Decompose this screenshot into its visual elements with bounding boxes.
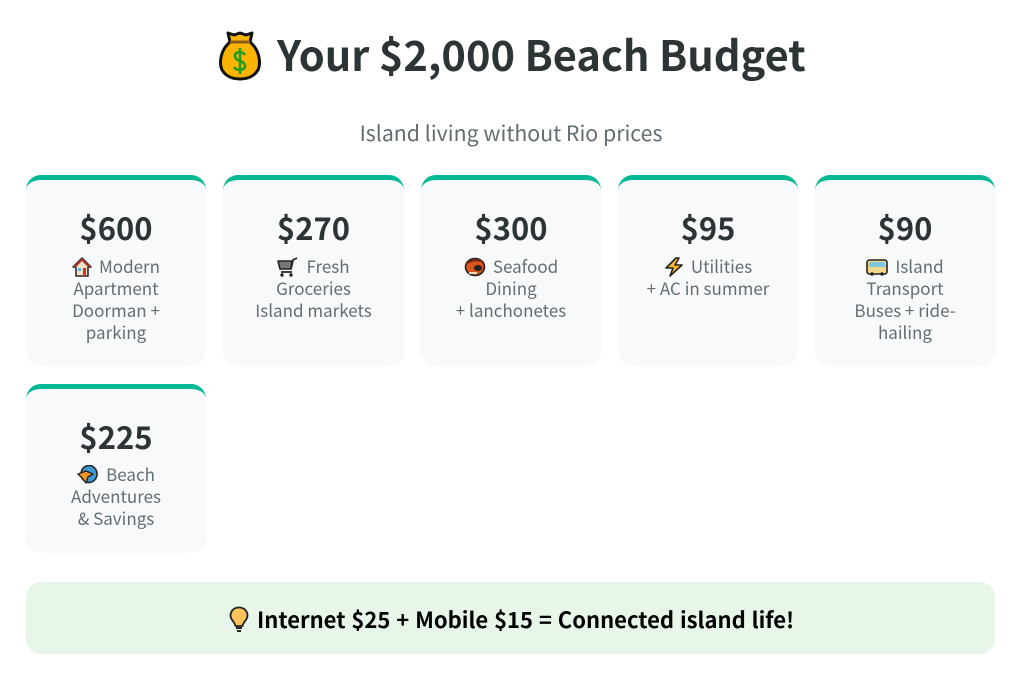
- heading text: Your $2,000 Beach Budget: [277, 23, 806, 83]
- description: [456, 253, 566, 322]
- description: [255, 253, 372, 322]
- description: Island: [895, 253, 944, 278]
- amount: $225: [79, 413, 153, 458]
- description: hailing: [878, 319, 932, 344]
- callout: connectivity: [26, 582, 995, 654]
- description: Utilities: [691, 253, 752, 278]
- description: Modern: [99, 253, 160, 278]
- description: [71, 461, 161, 530]
- panel: beach adventures: [26, 384, 206, 552]
- description: Transport: [866, 275, 944, 300]
- description: Seafood: [493, 253, 558, 278]
- description: + lanchonetes: [456, 297, 566, 322]
- title: [219, 23, 806, 83]
- description: Buses + ride-: [854, 297, 956, 322]
- amount: $300: [474, 204, 548, 249]
- description: Adventures: [71, 483, 161, 508]
- panel: seafood dining: [421, 175, 601, 366]
- subtitle: Island living without Rio prices: [360, 117, 662, 148]
- panel: modern apartment: [26, 175, 206, 366]
- amount: $90: [878, 204, 932, 249]
- description: Doorman +: [72, 297, 160, 322]
- description: [854, 253, 956, 344]
- panel: fresh groceries: [223, 175, 404, 366]
- description: & Savings: [78, 505, 154, 530]
- panel: utilities: [618, 175, 798, 366]
- description: [647, 253, 770, 300]
- amount: $270: [277, 204, 350, 249]
- icon: money bag: [219, 32, 261, 80]
- icon: light bulb: [230, 606, 248, 632]
- amount: $600: [79, 204, 153, 249]
- amount: $95: [681, 204, 735, 249]
- description: + AC in summer: [647, 275, 769, 300]
- description: [72, 253, 160, 344]
- description: Island markets: [255, 297, 372, 322]
- description: Apartment: [73, 275, 159, 300]
- description: Groceries: [276, 275, 351, 300]
- description: Dining: [485, 275, 537, 300]
- panel: island transport: [815, 175, 995, 366]
- description: parking: [86, 319, 146, 344]
- callout text: Internet $25 + Mobile $15 = Connected island life!: [257, 603, 794, 635]
- description: Fresh: [306, 253, 350, 278]
- description: Beach: [106, 461, 155, 486]
